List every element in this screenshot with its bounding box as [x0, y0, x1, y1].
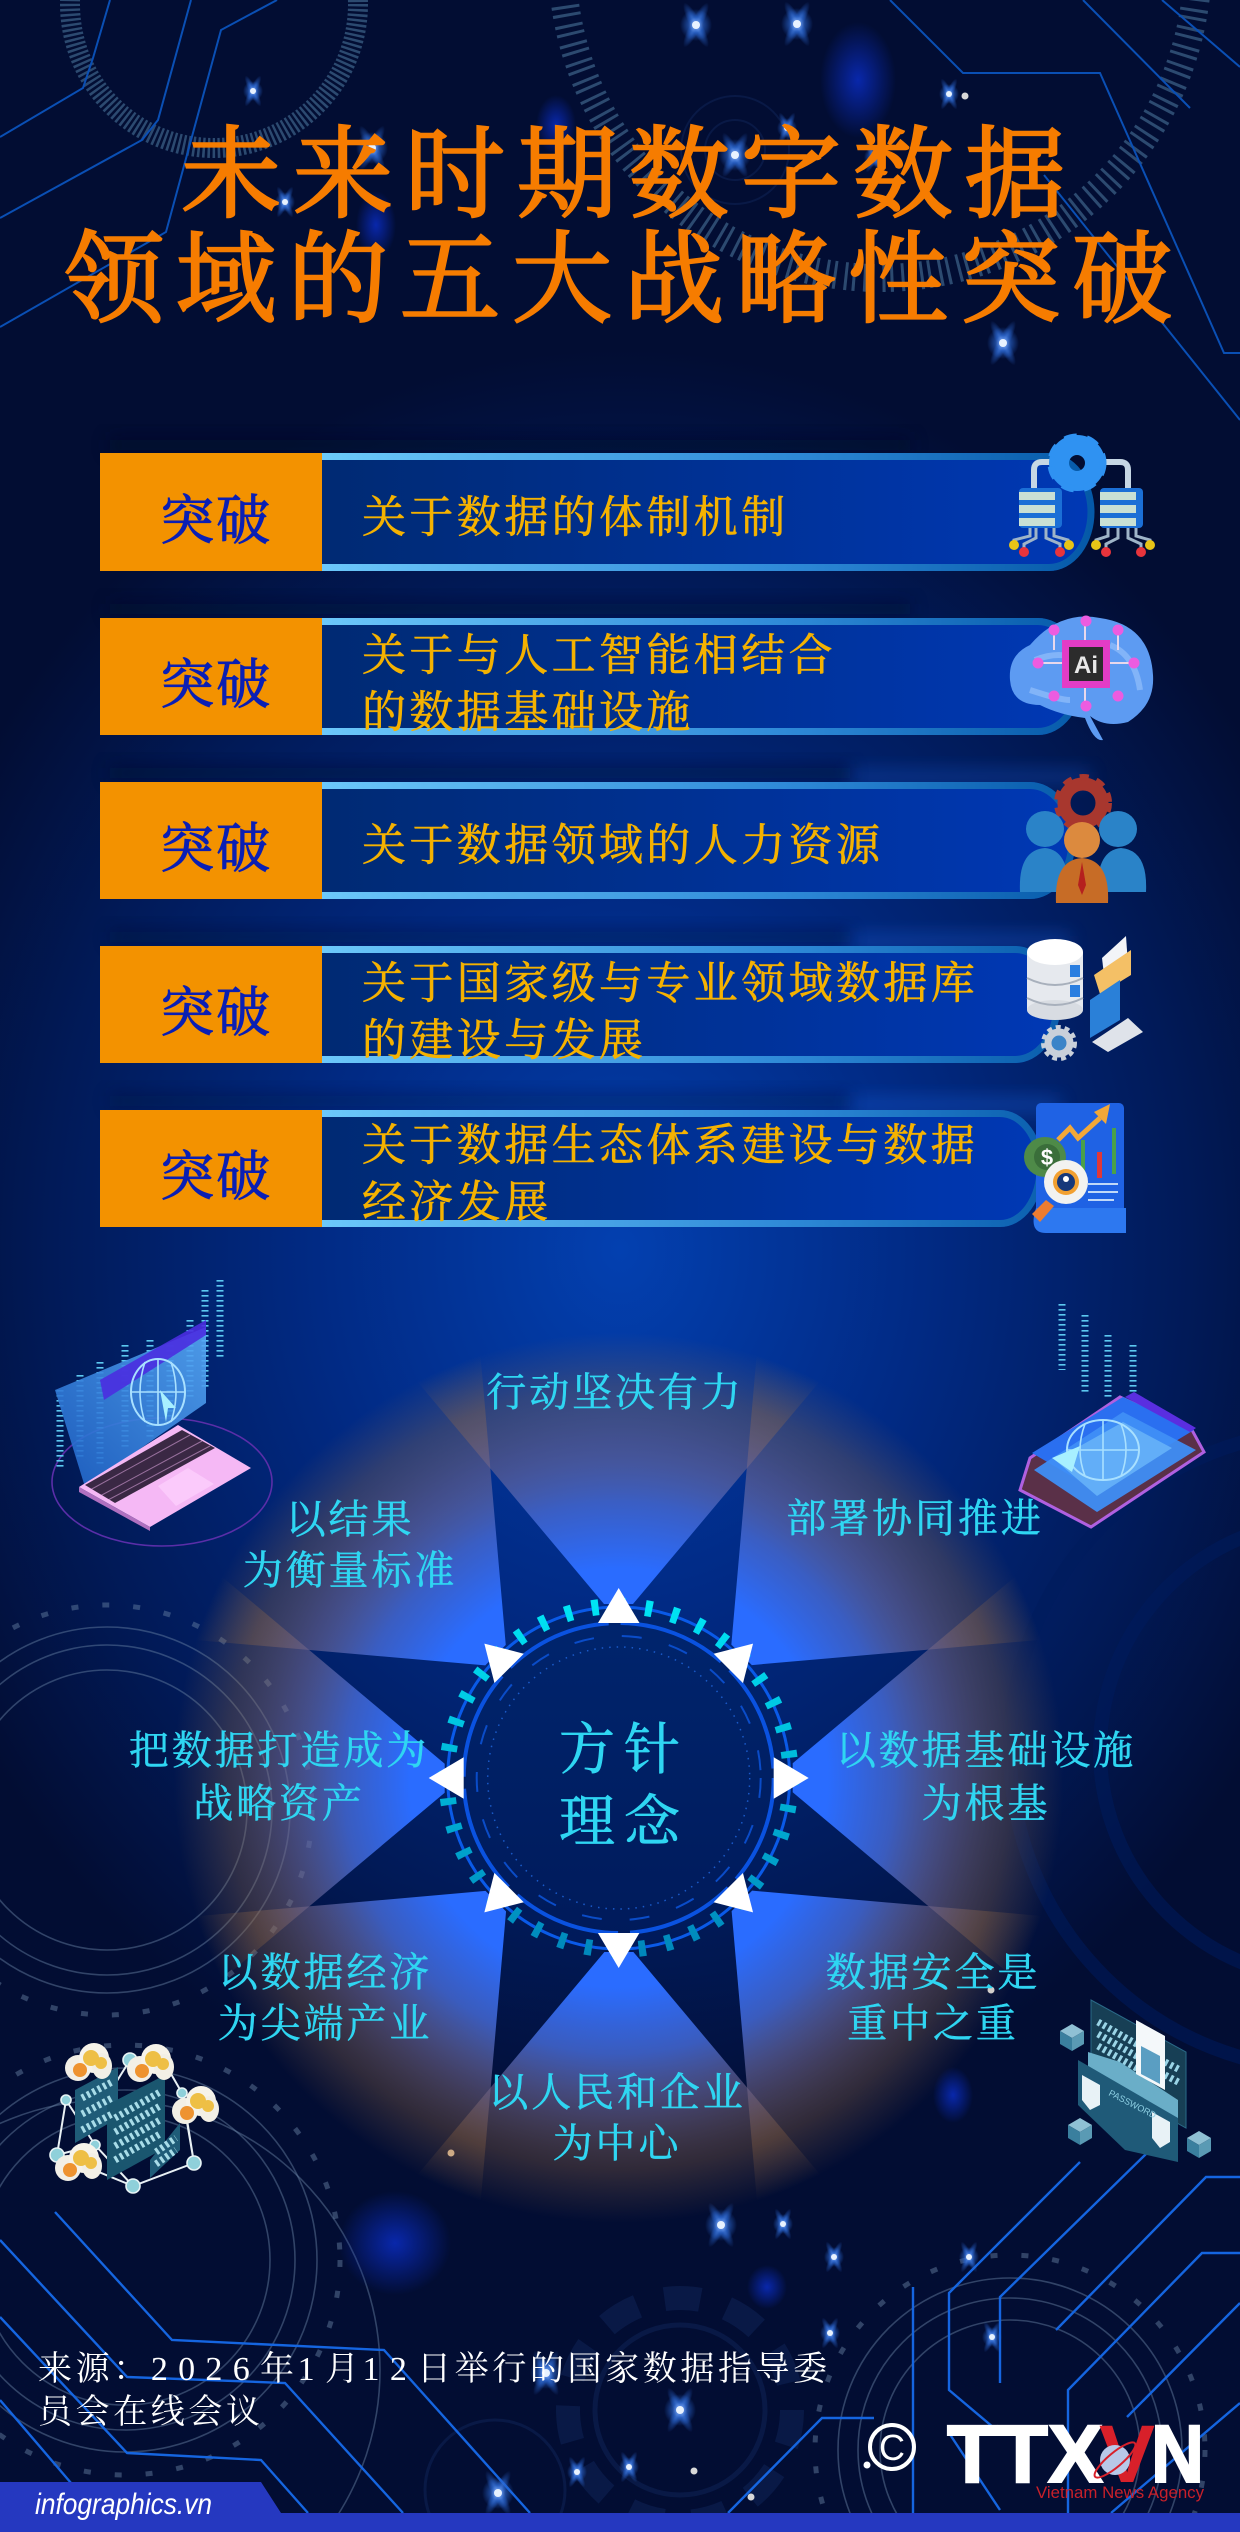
item text: 关于数据领域的人力资源	[362, 821, 883, 870]
label: infrastructure: 以数据基础设施	[836, 1728, 1136, 1773]
label: data security: 重中之重	[847, 2001, 1019, 2046]
logo: TTXVN: Vietnam News Agency	[1036, 2483, 1204, 2502]
label box	[100, 1110, 322, 1227]
label: data economy: 以数据经济	[218, 1950, 432, 1995]
footer bar	[0, 2482, 1240, 2532]
label: action: 行动坚决有力	[486, 1370, 744, 1415]
label text: 突破	[160, 983, 272, 1043]
label text: 突破	[160, 819, 272, 879]
center circle	[447, 1606, 791, 1950]
label: data security	[826, 1950, 1040, 2046]
item text: 的数据基础设施	[362, 688, 694, 737]
item text: 关于国家级与专业领域数据库	[362, 959, 978, 1008]
label: infrastructure: 为根基	[922, 1781, 1050, 1826]
item text	[362, 959, 978, 1065]
item text	[362, 1121, 978, 1227]
icon: white arrow markers	[429, 1588, 809, 1968]
footer site name: infographics.vn	[35, 2488, 212, 2521]
logo: TTXVN: TTX	[947, 2409, 1103, 2500]
item text: 关于与人工智能相结合	[362, 631, 836, 680]
label: people and business	[488, 2070, 746, 2166]
icon: database, folder, laptop	[1027, 936, 1143, 1059]
label: infrastructure	[836, 1728, 1136, 1826]
icon: financial scroll	[1024, 1103, 1126, 1233]
label text: 突破	[160, 491, 272, 551]
item text: 的建设与发展	[362, 1016, 646, 1065]
label: strategic asset: 把数据打造成为	[129, 1728, 429, 1773]
icon: financial scroll: $	[1041, 1145, 1053, 1170]
center text: 理念	[559, 1792, 689, 1854]
panel: breakthrough 5	[100, 1094, 1126, 1233]
icon: laptop	[52, 1280, 272, 1546]
label: strategic asset	[129, 1728, 429, 1826]
title	[64, 120, 1184, 336]
label box	[100, 946, 322, 1063]
label: coordination: 部署协同推进	[786, 1496, 1044, 1541]
item text: 关于数据的体制机制	[362, 493, 789, 542]
panel: breakthrough 2	[100, 602, 1153, 740]
logo: TTXVN: C	[879, 2427, 905, 2468]
label text: 突破	[160, 655, 272, 715]
center text	[559, 1720, 689, 1854]
logo: TTXVN: N	[1151, 2409, 1204, 2500]
center text: 方针	[559, 1720, 689, 1782]
label: people and business: 为中心	[553, 2121, 681, 2166]
title: 未来时期数字数据	[181, 120, 1077, 231]
label: strategic asset: 战略资产	[193, 1781, 365, 1826]
icon: password folder security: PASSWORD	[1107, 2088, 1158, 2121]
icon: team and gear	[1020, 777, 1146, 903]
label: data security: 数据安全是	[826, 1950, 1040, 1995]
label: results	[243, 1497, 457, 1593]
label box	[100, 453, 322, 571]
label text: 突破	[160, 1147, 272, 1207]
logo: TTXVN: V	[1099, 2409, 1155, 2500]
source note	[38, 2350, 831, 2431]
icon: blockchain data clouds	[50, 2043, 219, 2193]
label: data economy: 为尖端产业	[218, 2001, 432, 2046]
item text: 关于数据生态体系建设与数据	[362, 1121, 978, 1170]
panel: breakthrough 4	[100, 930, 1143, 1065]
chart: radial star rays	[113, 1273, 1124, 2283]
label box	[100, 782, 322, 899]
logo: TTXVN	[864, 2409, 1204, 2502]
label: results: 为衡量标准	[243, 1548, 457, 1593]
icon: AI brain: Ai	[1074, 652, 1098, 679]
item text	[362, 631, 836, 737]
label box	[100, 618, 322, 735]
icon: servers and gear	[1009, 437, 1155, 557]
icon: AI brain	[1010, 616, 1153, 740]
panel: breakthrough 1	[100, 437, 1155, 571]
label: results: 以结果	[286, 1497, 414, 1542]
source note: 员会在线会议	[38, 2393, 264, 2431]
label: people and business: 以人民和企业	[488, 2070, 746, 2115]
icon: password folder security	[1060, 2000, 1211, 2162]
panel: breakthrough 3	[100, 766, 1146, 903]
source note: 来源：2026年1月12日举行的国家数据指导委	[38, 2350, 831, 2388]
title: 领域的五大战略性突破	[64, 225, 1184, 336]
item text: 经济发展	[362, 1178, 552, 1227]
label: data economy	[218, 1950, 432, 2046]
icon: tablet	[1020, 1304, 1204, 1527]
